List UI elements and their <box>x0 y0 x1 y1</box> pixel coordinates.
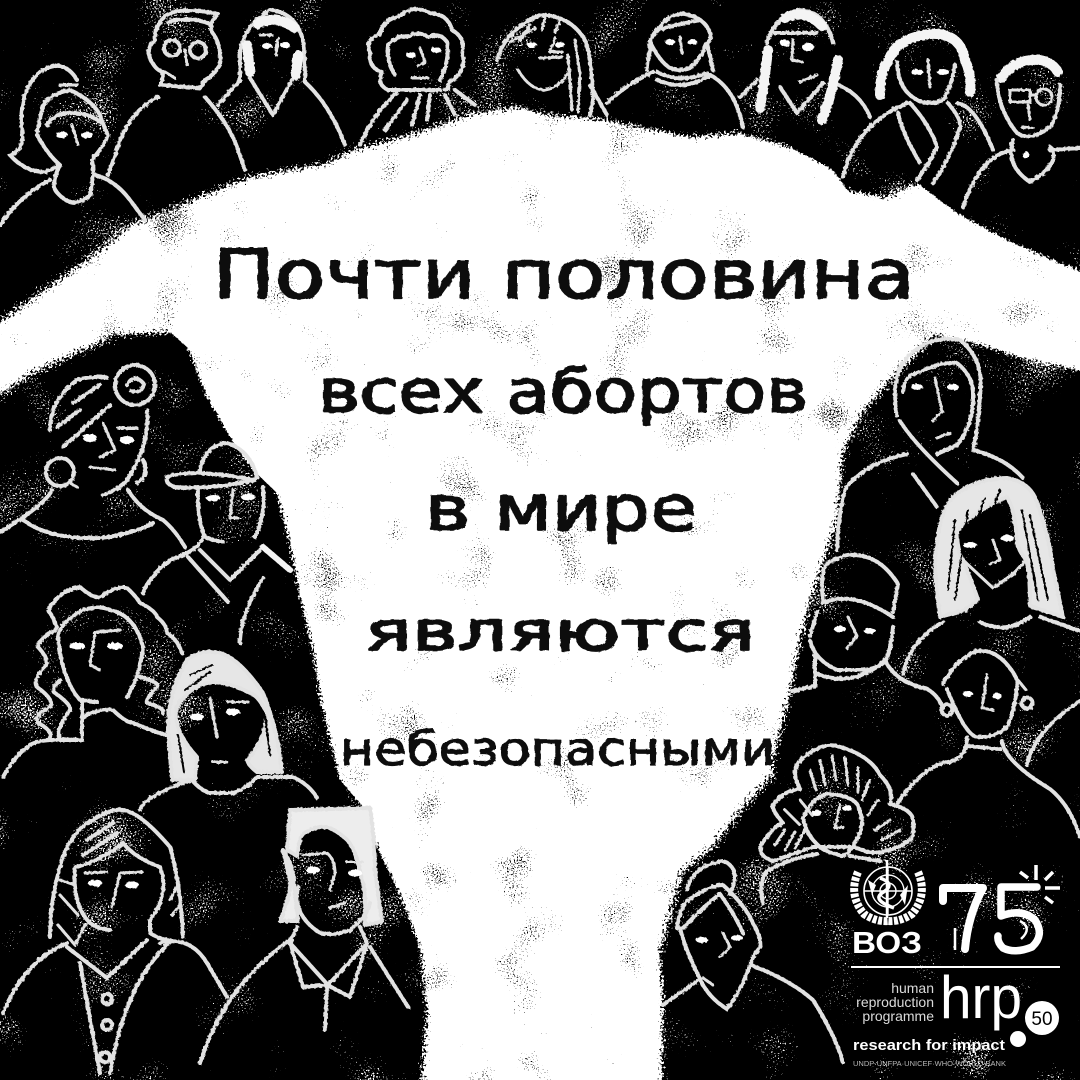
figure: woman with hair bun <box>663 861 843 1062</box>
logo divider <box>851 966 1060 968</box>
figure: woman with turban and spiral <box>0 365 185 547</box>
logo text: human reproduction programme: reproduction <box>856 994 934 1010</box>
logo: hrp wordmark: hrp <box>940 964 1022 1031</box>
logo text: ВОЗ: ВОЗ <box>852 925 922 960</box>
black chalk field: top crowd <box>0 0 1080 335</box>
logo text: human reproduction programme: human <box>891 980 934 996</box>
figure: woman with long wavy hair <box>3 587 182 777</box>
figure: woman with white hair and V neck <box>218 10 345 145</box>
figure: woman with wavy white hair in robe <box>843 34 993 183</box>
logo text: human reproduction programme: programme <box>862 1008 934 1024</box>
title line 1: Почти половина <box>213 236 915 315</box>
black chalk field: left crowd <box>0 332 427 1080</box>
figure: woman with parted hair and buttoned dress <box>3 810 227 1073</box>
figure: person in baseball cap <box>143 443 290 643</box>
figure: person in tall hat <box>792 555 943 708</box>
figure: person with earrings <box>897 651 1080 837</box>
figure: woman with long white hair <box>740 10 870 120</box>
figure: person with curly striped hair <box>761 745 913 904</box>
logo: WHO emblem <box>854 860 922 921</box>
logo: 50 badge: 50 <box>1031 1009 1053 1030</box>
logo: hrp dot <box>1010 1031 1026 1047</box>
figure: woman in hood <box>837 339 1023 550</box>
logo: 50 badge <box>1025 1001 1059 1035</box>
figure: man with square glasses and necklace <box>963 60 1080 207</box>
title line 2: всех абортов <box>318 357 808 427</box>
figure: woman with long light hair and fringe <box>903 478 1080 674</box>
figure: curly-haired woman in gathered dress <box>360 9 475 145</box>
figure: woman with ponytail <box>0 66 145 225</box>
title line 3: в мире <box>425 472 697 545</box>
title line 4: являются <box>365 600 755 663</box>
black chalk field: right crowd <box>660 335 1080 1080</box>
logo: 75th anniversary <box>943 865 1060 951</box>
figure: man with round glasses <box>108 10 245 175</box>
figure: woman with light hair <box>140 652 317 810</box>
logo text: partners: UNDP·UNFPA·UNICEF·WHO·WORLD BANK <box>853 1059 1006 1068</box>
title: main message <box>213 236 915 776</box>
figure: woman with braided hair <box>497 15 607 115</box>
figure: person with crew neck collar <box>607 14 743 127</box>
figure: person with blocky white hair and collar <box>200 808 408 1063</box>
logo text: research for impact: research for impact <box>853 1037 1005 1054</box>
logo text: human reproduction programme <box>856 980 934 1024</box>
title line 5: небезопасными <box>340 722 775 776</box>
